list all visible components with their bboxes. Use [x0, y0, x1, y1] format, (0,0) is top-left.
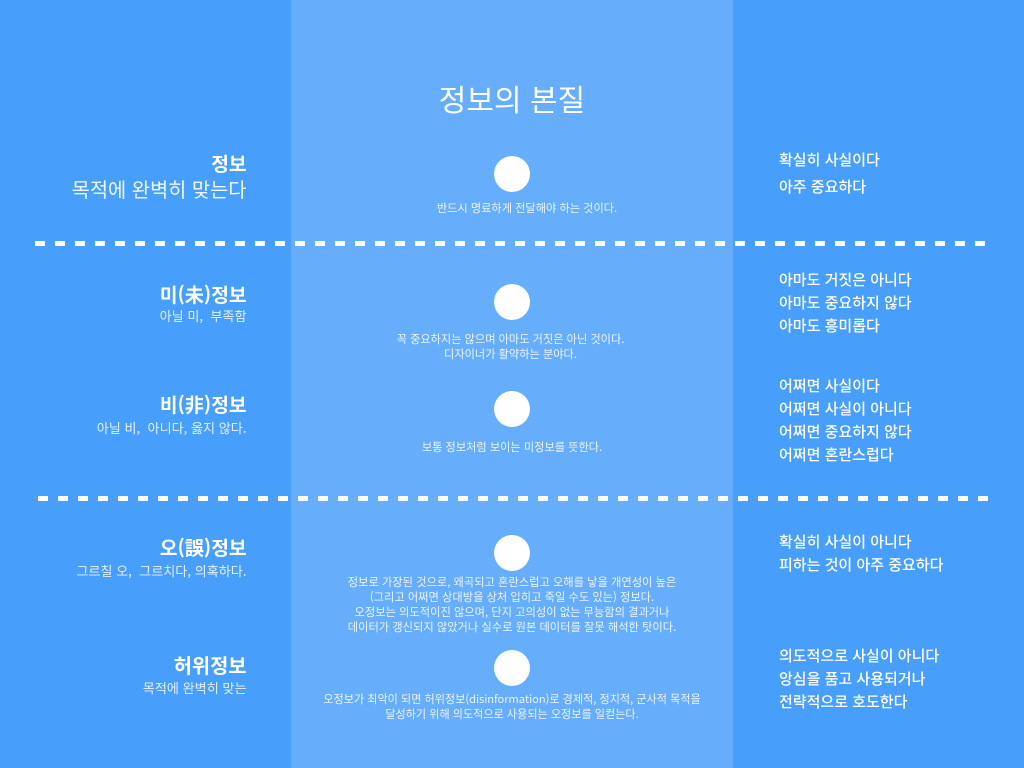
description: information: 반드시 명료하게 전달해야 하는 것이다.	[437, 200, 617, 216]
traits: information	[779, 149, 880, 197]
description: misinformation: 데이터가 갱신되지 않았거나 실수로 원본 데이터를 잘못 해석한 탓이다.	[348, 618, 676, 634]
subheading: information: 목적에 완벽히 맞는다	[72, 174, 246, 203]
traits: disinformation	[779, 645, 939, 712]
traits: mal-information	[779, 269, 912, 336]
description: mal-information: 디자이너가 활약하는 분야다.	[444, 346, 577, 362]
divider: top	[35, 241, 987, 246]
description: disinformation: 오정보가 최악이 되면 허위정보(disinformation)로 경제적, 정치적, 군사적 목적을	[323, 690, 701, 706]
icon: circle	[494, 650, 530, 686]
traits: non-information: 어쩌면 사실이다	[779, 375, 880, 396]
description: misinformation: 정보로 가장된 것으로, 왜곡되고 혼란스럽고 오해를 낳을 개연성이 높은	[348, 574, 676, 590]
icon: circle	[494, 535, 530, 571]
traits: disinformation: 전략적으로 호도한다	[779, 691, 907, 712]
traits: non-information: 어쩌면 중요하지 않다	[779, 421, 912, 442]
traits: non-information	[779, 375, 912, 465]
panel: center column	[291, 0, 733, 768]
icon: circle	[494, 156, 530, 192]
traits: disinformation: 의도적으로 사실이 아니다	[779, 645, 939, 666]
traits: misinformation	[779, 531, 944, 575]
description: disinformation	[323, 690, 701, 722]
row: information	[72, 149, 880, 216]
traits: misinformation: 피하는 것이 아주 중요하다	[779, 554, 943, 575]
description: misinformation: (그리고 어쩌면 상대방을 상처 입히고 죽일 수도 있는) 정보다.	[370, 588, 654, 604]
description: misinformation: 오정보는 의도적이진 않으며, 단지 고의성이 없는 무능함의 결과거나	[354, 604, 670, 620]
traits: non-information: 어쩌면 혼란스럽다	[779, 444, 894, 465]
subheading: misinformation: 그르칠 오, 그르치다, 의혹하다.	[76, 561, 246, 580]
row: misinformation	[76, 531, 944, 634]
heading: mal-information: 미(未)정보	[160, 280, 246, 308]
traits: non-information: 어쩌면 사실이 아니다	[779, 398, 912, 419]
row: disinformation	[143, 645, 939, 722]
traits: information: 확실히 사실이다	[779, 149, 880, 170]
traits: disinformation: 앙심을 품고 사용되거나	[779, 668, 925, 689]
subheading: mal-information: 아닐 미, 부족함	[160, 306, 246, 325]
row: non-information	[97, 375, 912, 465]
traits: mal-information: 아마도 흥미롭다	[779, 315, 880, 336]
subheading: non-information: 아닐 비, 아니다, 옳지 않다.	[97, 418, 246, 437]
description: mal-information	[397, 330, 624, 362]
row: mal-information	[160, 269, 912, 362]
heading: disinformation: 허위정보	[174, 650, 246, 679]
heading: information: 정보	[211, 149, 246, 177]
traits: misinformation: 확실히 사실이 아니다	[779, 531, 912, 552]
icon: circle	[494, 284, 530, 320]
heading: misinformation: 오(誤)정보	[160, 533, 246, 561]
description: mal-information: 꼭 중요하지는 않으며 아마도 거짓은 아닌 것이다.	[397, 330, 624, 346]
description: misinformation	[348, 574, 676, 634]
description: non-information: 보통 정보처럼 보이는 미정보를 뜻한다.	[422, 439, 602, 455]
divider: bottom	[38, 496, 990, 501]
heading: non-information: 비(非)정보	[160, 390, 246, 418]
traits: mal-information: 아마도 거짓은 아니다	[779, 269, 912, 290]
subheading: disinformation: 목적에 완벽히 맞는	[143, 678, 246, 697]
title: 정보의 본질	[439, 76, 585, 120]
description: disinformation: 달성하기 위해 의도적으로 사용되는 오정보를 일컫는다.	[385, 706, 639, 722]
traits: information: 아주 중요하다	[779, 176, 866, 197]
icon: circle	[494, 391, 530, 427]
traits: mal-information: 아마도 중요하지 않다	[779, 292, 912, 313]
